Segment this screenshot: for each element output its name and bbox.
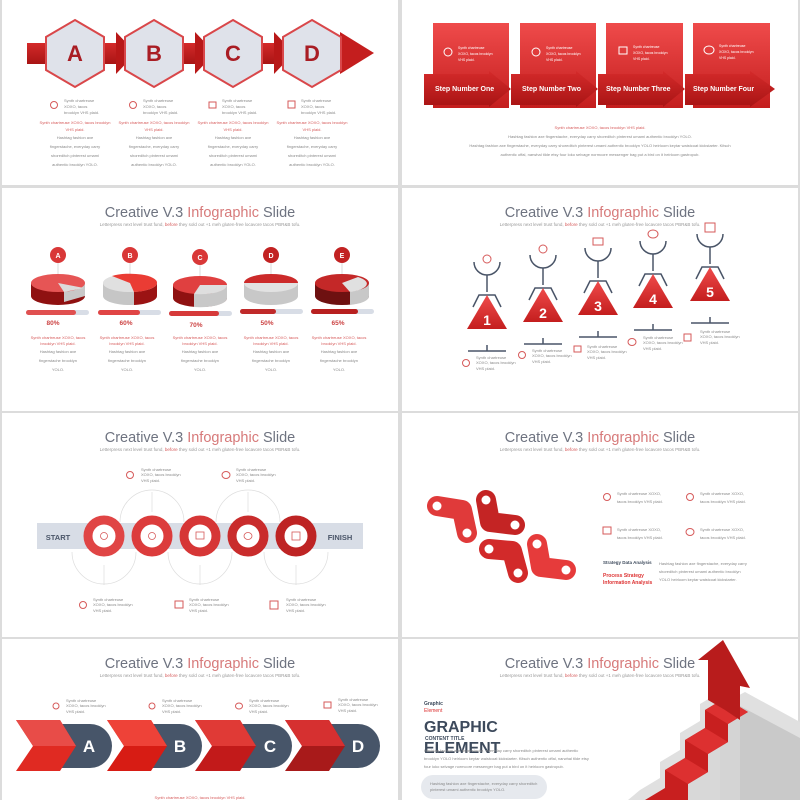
percentages and text: brooklyn VHS plaid. — [253, 341, 289, 346]
percentages and text: fingerstache brooklyn — [181, 358, 219, 363]
text columns: XOXO, tacos — [301, 104, 324, 109]
text columns: VHS plaid. — [66, 127, 84, 132]
percentages and text: Hashtag fashion axe — [321, 349, 358, 354]
items: Synth chartreuse XOXO, — [700, 527, 744, 532]
captions: XOXO, tacos brooklyn — [643, 340, 683, 345]
footer text: Synth chartreuse XOXO, tacos brooklyn VHS plaid. — [155, 795, 245, 800]
text columns: fingerstache, everyday carry — [129, 144, 179, 149]
heading block: Hashtag fashion axe fingerstache, everyday carry shoreditch pinterest umami authentic — [424, 748, 578, 753]
text columns: Synth chartreuse XOXO, tacos brooklyn — [40, 120, 110, 125]
pill note — [421, 775, 547, 799]
letters: D — [352, 737, 364, 756]
strategy text: YOLO heirloom keytar waistcoat kickstarter. — [659, 577, 737, 582]
cards: XOXO, tacos brooklyn — [719, 50, 754, 54]
captions: Synth chartreuse — [643, 335, 674, 340]
description: Hashtag fashion axe fingerstache, everyday carry shoreditch pinterest umami authentic brooklyn YOLO heirloom keytar waistcoat kickstarter. Kitsch — [469, 143, 731, 148]
percentages and text: fingerstache brooklyn — [108, 358, 146, 363]
text columns: shoreditch pinterest umami — [51, 153, 99, 158]
connector arcs — [72, 490, 328, 585]
title: Creative V.3 Infographic Slide — [105, 205, 295, 221]
captions: XOXO, tacos brooklyn — [66, 703, 106, 708]
title — [500, 656, 700, 678]
heading block: Graphic — [424, 701, 443, 707]
percentages and text — [31, 320, 366, 372]
cards: VHS plaid. — [458, 58, 475, 62]
captions: VHS plaid. — [93, 608, 112, 613]
title — [100, 430, 300, 452]
captions: VHS plaid. — [236, 478, 255, 483]
captions: Synth chartreuse — [338, 697, 369, 702]
heading block: GRAPHIC — [424, 719, 498, 736]
pills — [60, 724, 380, 768]
percentages and text: fingerstache brooklyn — [39, 358, 77, 363]
percentages and text: Synth chartreuse XOXO, tacos — [100, 335, 154, 340]
text columns: fingerstache, everyday carry — [287, 144, 337, 149]
text columns — [40, 98, 347, 167]
title: Letterpress next level trust fund, before they sold out +1 meh gluten-free locavore tacos PBR&B tofu. — [100, 673, 300, 678]
panel: pie charts — [2, 188, 398, 411]
text columns: authentic brooklyn YOLO. — [210, 162, 256, 167]
cards: Synth chartreuse — [546, 46, 573, 50]
heading block: four loko selvage normcore messenger bag put a bird on it heirloom gastropub. — [424, 764, 564, 769]
percentages and text: YOLO. — [121, 367, 133, 372]
items: tacos brooklyn VHS plaid. — [700, 535, 746, 540]
items: Synth chartreuse XOXO, — [700, 491, 744, 496]
step arrows: Step Number Two — [522, 86, 581, 93]
numbered triangles: 1 — [483, 312, 491, 328]
captions: XOXO, tacos brooklyn — [338, 702, 378, 707]
panel: step cards — [402, 0, 798, 185]
cards: Synth chartreuse — [458, 46, 485, 50]
percentages and text: 80% — [46, 320, 60, 327]
percentages and text: 50% — [260, 320, 274, 327]
text columns: XOXO, tacos — [222, 104, 245, 109]
text columns: Synth chartreuse XOXO, tacos brooklyn — [119, 120, 189, 125]
title — [500, 205, 700, 227]
text columns: Synth chartreuse — [143, 98, 174, 103]
band: START — [46, 533, 71, 542]
letters: A — [83, 737, 95, 756]
captions: XOXO, tacos brooklyn — [162, 703, 202, 708]
percentages and text: Hashtag fashion axe — [182, 349, 219, 354]
panel: hexagon ABCD — [2, 0, 398, 185]
captions: XOXO, tacos brooklyn — [286, 602, 326, 607]
strategy text: Information Analysis — [603, 580, 652, 586]
pies: C — [197, 255, 203, 262]
items: tacos brooklyn VHS plaid. — [700, 499, 746, 504]
text columns: shoreditch pinterest umami — [288, 153, 336, 158]
percentages and text: brooklyn VHS plaid. — [40, 341, 76, 346]
captions: Synth chartreuse — [141, 467, 172, 472]
text columns: brooklyn VHS plaid. — [143, 110, 178, 115]
strategy text: Strategy Data Analysis — [603, 560, 652, 565]
pies: A — [55, 253, 61, 260]
percentages and text: Hashtag fashion axe — [40, 349, 77, 354]
percentages and text: YOLO. — [265, 367, 277, 372]
captions: XOXO, tacos brooklyn — [476, 360, 516, 365]
captions — [462, 329, 740, 371]
title: Letterpress next level trust fund, before they sold out +1 meh gluten-free locavore tacos PBR&B tofu. — [100, 222, 300, 227]
description: Hashtag fashion axe fingerstache, everyday carry shoreditch pinterest umami authentic brooklyn YOLO. — [508, 134, 692, 139]
panel: triangle figures — [402, 188, 798, 411]
hexagons: D — [304, 41, 320, 66]
items: tacos brooklyn VHS plaid. — [617, 535, 663, 540]
heading block: ELEMENT — [424, 740, 501, 757]
percentages and text: Hashtag fashion axe — [109, 349, 146, 354]
pies: E — [340, 253, 345, 260]
title: Letterpress next level trust fund, before they sold out +1 meh gluten-free locavore tacos PBR&B tofu. — [500, 222, 700, 227]
panel: graphic element stairs — [402, 639, 800, 800]
hexagons: B — [146, 41, 162, 66]
text columns: Synth chartreuse — [64, 98, 95, 103]
title — [500, 430, 700, 452]
cards: XOXO, tacos brooklyn — [633, 51, 668, 55]
text columns: brooklyn VHS plaid. — [64, 110, 99, 115]
percentages and text: fingerstache brooklyn — [320, 358, 358, 363]
numbered triangles: 5 — [706, 284, 714, 300]
text columns: brooklyn VHS plaid. — [301, 110, 336, 115]
description: authentic offal, narwhal tilde etsy four loko selvage normcore messenger bag put a bird on it heirloom gastropub. — [501, 152, 699, 157]
strategy text: Hashtag fashion axe fingerstache, everyday carry — [659, 561, 747, 566]
band — [37, 523, 363, 549]
numbered triangles: 4 — [649, 291, 657, 307]
percentages and text: YOLO. — [194, 367, 206, 372]
captions: VHS plaid. — [162, 709, 181, 714]
text columns: fingerstache, everyday carry — [50, 144, 100, 149]
title: Creative V.3 Infographic Slide — [505, 205, 695, 221]
step arrows: Step Number Three — [606, 86, 671, 93]
panel: chevrons ABCD — [2, 639, 398, 800]
band: FINISH — [328, 533, 352, 542]
text columns: Synth chartreuse XOXO, tacos brooklyn — [277, 120, 347, 125]
chevrons — [16, 720, 345, 771]
hexagons: C — [225, 41, 241, 66]
title: Letterpress next level trust fund, before they sold out +1 meh gluten-free locavore tacos PBR&B tofu. — [500, 447, 700, 452]
percentages and text: YOLO. — [52, 367, 64, 372]
captions: XOXO, tacos brooklyn — [236, 472, 276, 477]
pies: B — [127, 253, 133, 260]
captions: Synth chartreuse — [66, 698, 97, 703]
text columns: authentic brooklyn YOLO. — [52, 162, 98, 167]
cards: XOXO, tacos brooklyn — [546, 52, 581, 56]
cards: VHS plaid. — [546, 58, 563, 62]
percentages and text: brooklyn VHS plaid. — [321, 341, 357, 346]
numbered triangles: 2 — [539, 305, 547, 321]
captions: VHS plaid. — [66, 709, 85, 714]
text columns: Hashtag fashion axe — [215, 135, 252, 140]
pill note: Hashtag fashion axe fingerstache, everyday carry shoreditch — [430, 781, 537, 786]
captions: Synth chartreuse — [700, 329, 731, 334]
text columns: XOXO, tacos — [143, 104, 166, 109]
panel: start finish rings — [2, 413, 398, 637]
step arrows — [424, 71, 775, 107]
hexagons — [46, 20, 341, 87]
captions — [80, 467, 326, 613]
captions: VHS plaid. — [338, 708, 357, 713]
captions: Synth chartreuse — [189, 597, 220, 602]
cards: VHS plaid. — [719, 56, 736, 60]
text columns: brooklyn VHS plaid. — [222, 110, 257, 115]
percentages and text: 65% — [331, 320, 345, 327]
heading block: brooklyn YOLO heirloom keytar waistcoat kickstarter. Kitsch authentic offal, narwhal tilde etsy — [424, 756, 589, 761]
step arrows: Step Number One — [435, 86, 494, 93]
text columns: fingerstache, everyday carry — [208, 144, 258, 149]
heading block — [424, 701, 589, 769]
red carpet — [645, 698, 748, 800]
items: Synth chartreuse XOXO, — [617, 527, 661, 532]
letters — [83, 737, 364, 756]
strategy text — [603, 560, 747, 586]
percentages and text: Synth chartreuse XOXO, tacos — [173, 335, 227, 340]
percentages and text: brooklyn VHS plaid. — [182, 341, 218, 346]
hexagons: A — [67, 41, 83, 66]
text columns: authentic brooklyn YOLO. — [289, 162, 335, 167]
items: tacos brooklyn VHS plaid. — [617, 499, 663, 504]
percentages and text: 70% — [189, 322, 203, 329]
arrow band — [27, 32, 374, 74]
text columns: Hashtag fashion axe — [57, 135, 94, 140]
captions: Synth chartreuse — [162, 698, 193, 703]
progress bars — [26, 309, 374, 316]
title — [100, 205, 300, 227]
heading block: Element — [424, 708, 443, 714]
captions: XOXO, tacos brooklyn — [587, 349, 627, 354]
items: Synth chartreuse XOXO, — [617, 491, 661, 496]
description — [469, 125, 731, 157]
captions: VHS plaid. — [476, 366, 495, 371]
arrow — [698, 640, 750, 720]
captions — [53, 697, 378, 714]
title: Letterpress next level trust fund, before they sold out +1 meh gluten-free locavore tacos PBR&B tofu. — [100, 447, 300, 452]
text columns: authentic brooklyn YOLO. — [131, 162, 177, 167]
captions: VHS plaid. — [141, 478, 160, 483]
letters: C — [264, 737, 276, 756]
text columns: Synth chartreuse — [222, 98, 253, 103]
percentages and text: brooklyn VHS plaid. — [109, 341, 145, 346]
title: Creative V.3 Infographic Slide — [105, 430, 295, 446]
captions: VHS plaid. — [249, 709, 268, 714]
panel: puzzle shapes — [402, 413, 798, 637]
description: Synth chartreuse XOXO, tacos brooklyn VHS plaid. — [555, 125, 645, 130]
letters: B — [174, 737, 186, 756]
percentages and text: YOLO. — [333, 367, 345, 372]
strategy text: Process Strategy — [603, 573, 644, 579]
rings — [88, 520, 312, 552]
text columns: shoreditch pinterest umami — [130, 153, 178, 158]
step arrows: Step Number Four — [693, 86, 754, 93]
stairs — [628, 640, 800, 800]
captions: XOXO, tacos brooklyn — [700, 334, 740, 339]
text columns: VHS plaid. — [224, 127, 242, 132]
figures — [468, 223, 729, 351]
items — [603, 491, 746, 540]
captions: Synth chartreuse — [532, 348, 563, 353]
text columns: VHS plaid. — [303, 127, 321, 132]
title: Creative V.3 Infographic Slide — [505, 430, 695, 446]
captions: Synth chartreuse — [286, 597, 317, 602]
cards: Synth chartreuse — [633, 45, 660, 49]
numbered triangles — [467, 267, 730, 329]
captions: Synth chartreuse — [236, 467, 267, 472]
text columns: VHS plaid. — [145, 127, 163, 132]
title: Creative V.3 Infographic Slide — [105, 656, 295, 672]
numbered triangles: 3 — [594, 298, 602, 314]
title: Creative V.3 Infographic Slide — [505, 656, 695, 672]
pill note: pinterest umami authentic brooklyn YOLO. — [430, 787, 505, 792]
percentages and text: Synth chartreuse XOXO, tacos — [244, 335, 298, 340]
cards: XOXO, tacos brooklyn — [458, 52, 493, 56]
percentages and text: Synth chartreuse XOXO, tacos — [312, 335, 366, 340]
cards: Synth chartreuse — [719, 44, 746, 48]
captions: Synth chartreuse — [249, 698, 280, 703]
text columns: Synth chartreuse — [301, 98, 332, 103]
heading block: CONTENT TITLE — [425, 736, 465, 742]
L shapes — [437, 500, 566, 573]
title: Letterpress next level trust fund, before they sold out +1 meh gluten-free locavore tacos PBR&B tofu. — [500, 673, 700, 678]
strategy text: shoreditch pinterest umami authentic brooklyn — [659, 569, 741, 574]
text columns: Synth chartreuse XOXO, tacos brooklyn — [198, 120, 268, 125]
captions: VHS plaid. — [643, 346, 662, 351]
captions: XOXO, tacos brooklyn — [532, 353, 572, 358]
percentages and text: 60% — [119, 320, 133, 327]
percentages and text: fingerstache brooklyn — [252, 358, 290, 363]
cards: VHS plaid. — [633, 57, 650, 61]
captions: Synth chartreuse — [476, 355, 507, 360]
captions: XOXO, tacos brooklyn — [249, 703, 289, 708]
text columns: shoreditch pinterest umami — [209, 153, 257, 158]
captions: VHS plaid. — [189, 608, 208, 613]
captions: Synth chartreuse — [587, 344, 618, 349]
captions: VHS plaid. — [532, 359, 551, 364]
text columns: Hashtag fashion axe — [294, 135, 331, 140]
cards — [433, 23, 770, 108]
captions: VHS plaid. — [587, 355, 606, 360]
text columns: Hashtag fashion axe — [136, 135, 173, 140]
captions: XOXO, tacos brooklyn — [93, 602, 133, 607]
pies: D — [268, 253, 274, 260]
text columns: XOXO, tacos — [64, 104, 87, 109]
captions: VHS plaid. — [286, 608, 305, 613]
percentages and text: Hashtag fashion axe — [253, 349, 290, 354]
captions: VHS plaid. — [700, 340, 719, 345]
captions: Synth chartreuse — [93, 597, 124, 602]
title — [100, 656, 300, 678]
pies — [31, 247, 369, 307]
captions: XOXO, tacos brooklyn — [141, 472, 181, 477]
captions: XOXO, tacos brooklyn — [189, 602, 229, 607]
percentages and text: Synth chartreuse XOXO, tacos — [31, 335, 85, 340]
